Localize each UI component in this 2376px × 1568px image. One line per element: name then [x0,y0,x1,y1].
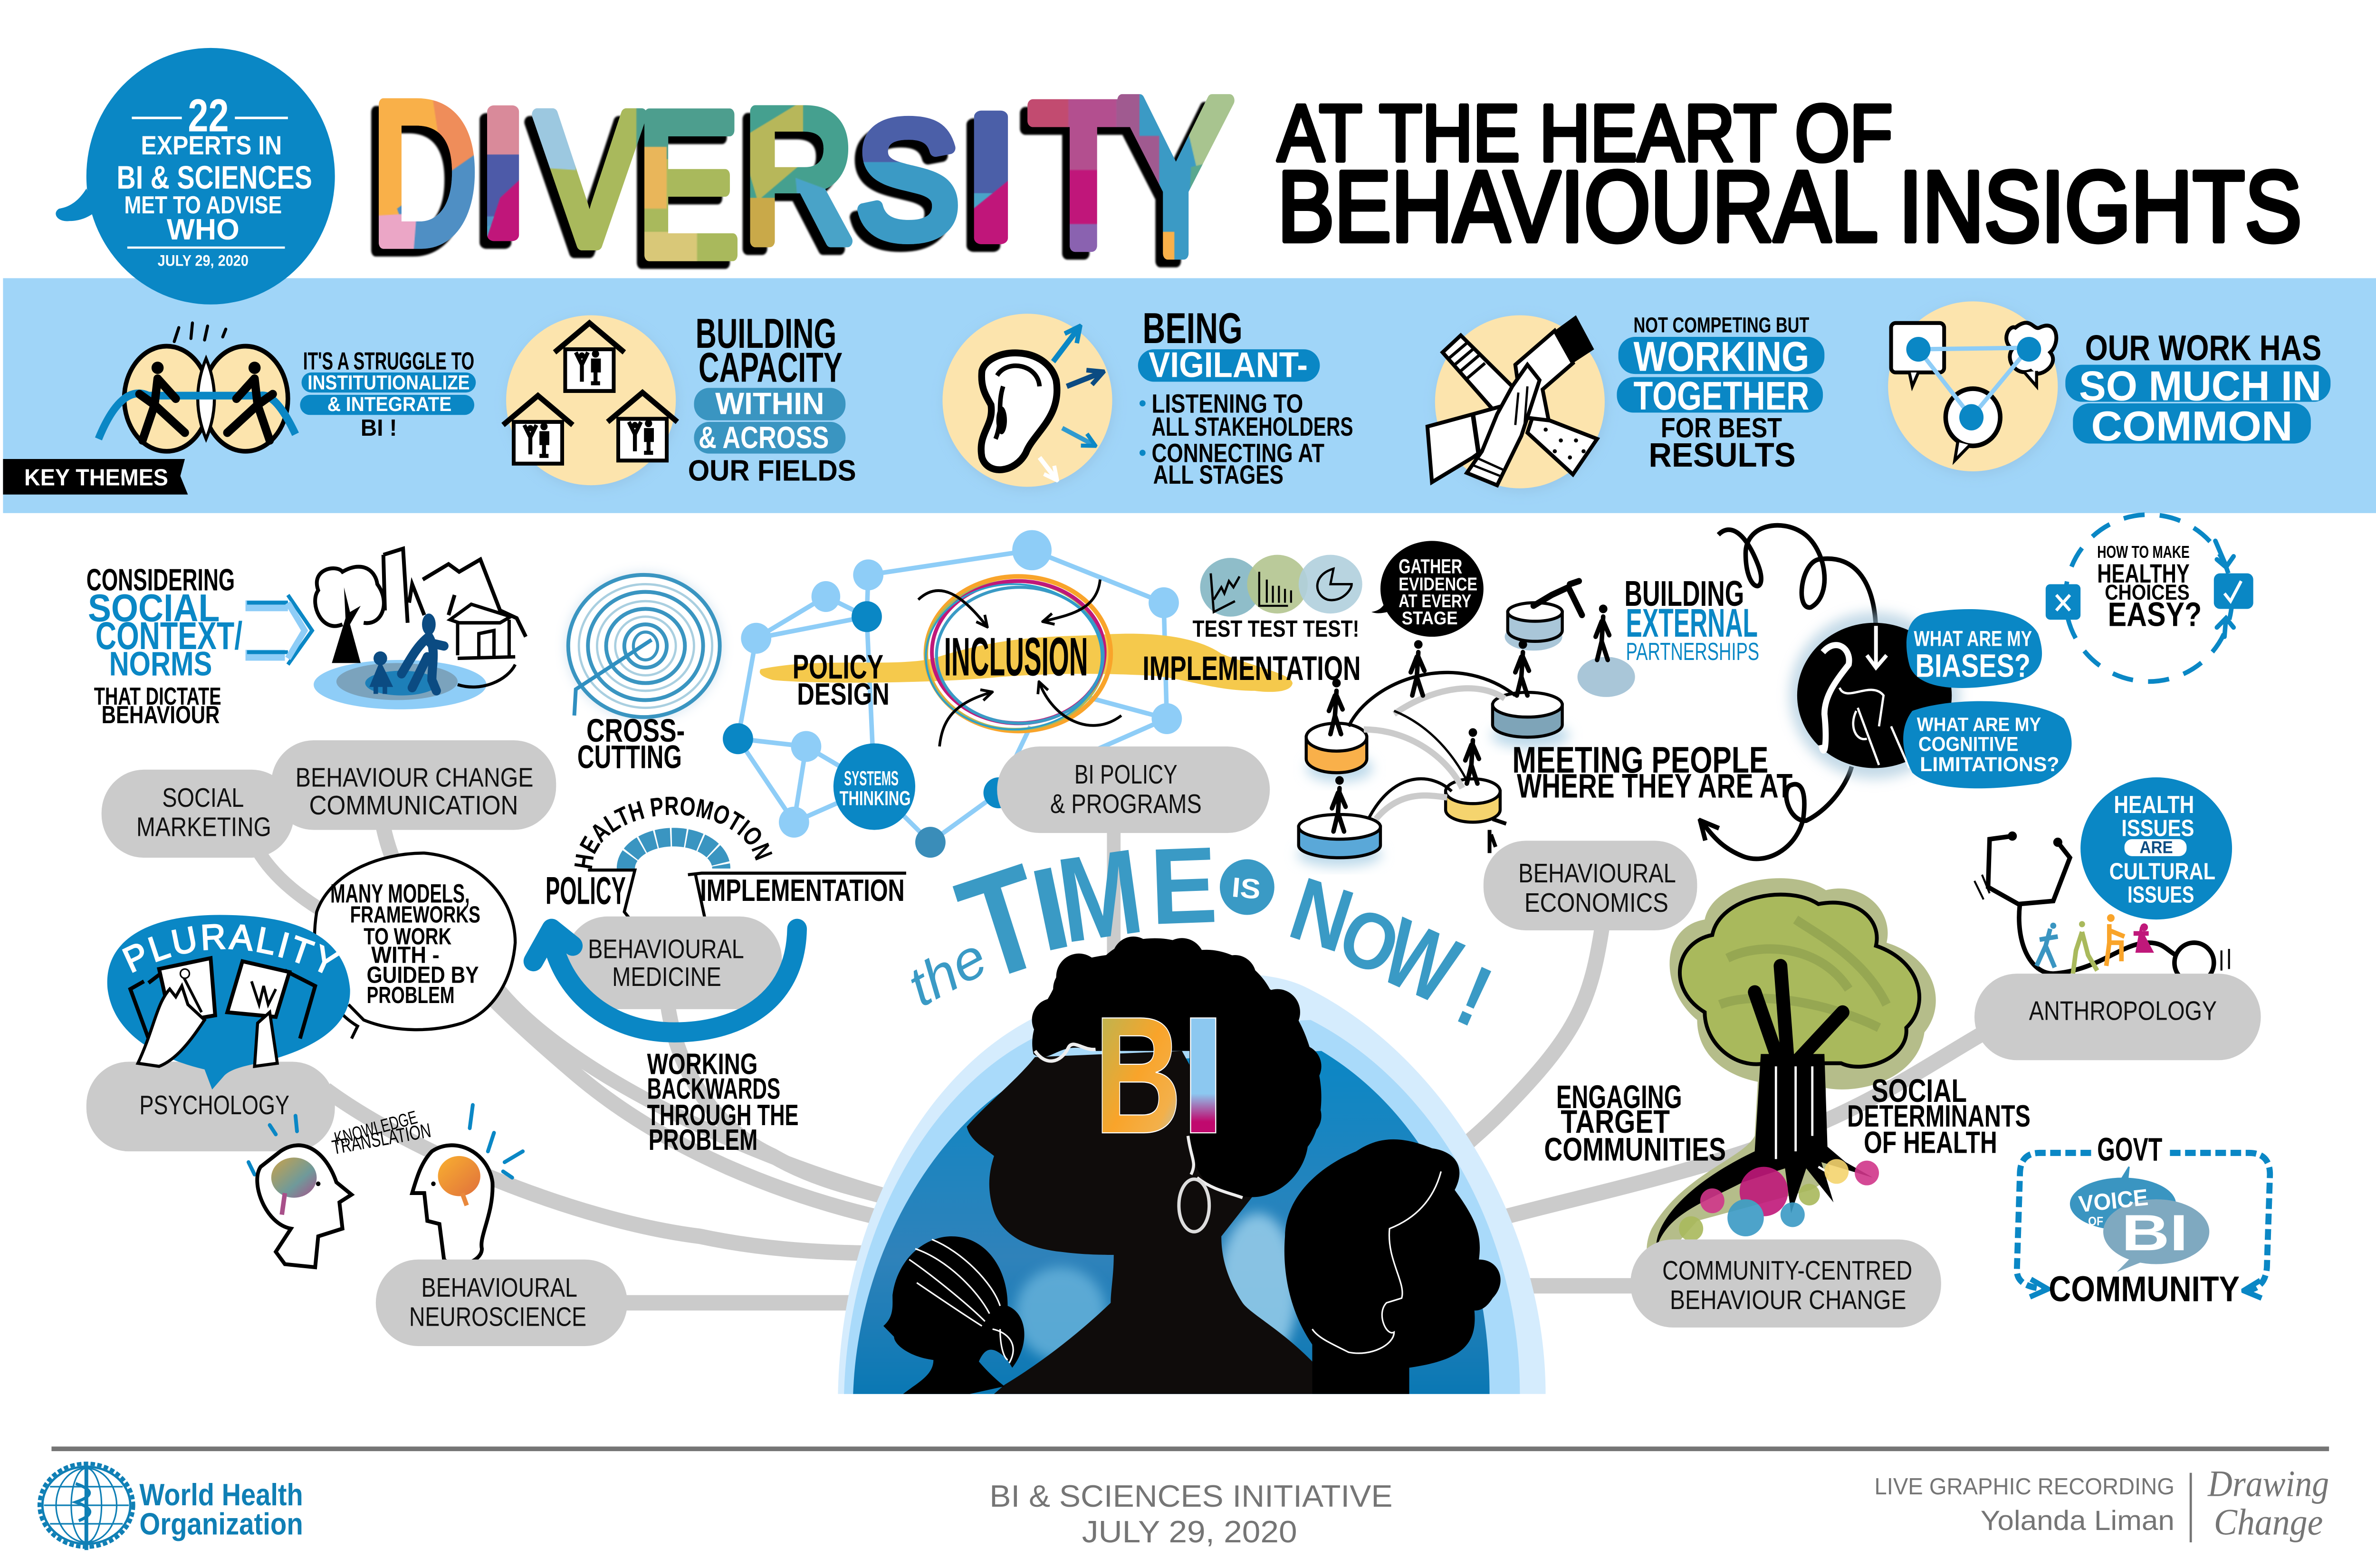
speech bubble: many models [315,853,515,1039]
footer: credit: LIVE GRAPHIC RECORDING [1875,1474,2175,1500]
theme 3: being vigilant [942,304,1353,490]
title: at the heart of behavioural insights [1277,88,2302,263]
network: policy to implementation [723,530,1361,858]
grey pill: behaviour change communication: BEHAVIOUR CHANGE [296,762,533,793]
test test test charts: TEST TEST TEST! [1193,616,1359,642]
grey pill: community-centred behaviour change: COMMUNITY-CENTRED [1662,1255,1912,1285]
grey pill: psychology: PSYCHOLOGY [139,1090,289,1120]
headline: the time is now: W [1368,898,1474,1024]
heads: knowledge translation: KNOWLEDGE [332,1107,420,1149]
speech bubble: cognitive limitations [1903,701,2072,788]
root dots [1679,1159,1879,1241]
central dome [838,974,1546,1394]
icon: three houses [503,316,677,488]
bullets: CONNECTING AT [1151,438,1324,468]
headline: the time is now: the [898,926,996,1018]
text: working backwards: BACKWARDS [647,1072,780,1105]
logo: World Health Organization: World Health [139,1477,303,1512]
speech bubble: many models: MANY MODELS, [330,879,470,908]
speech bubble: gather evidence: AT EVERY [1399,591,1471,612]
health promotion arch: HEALTH PROMOTION [568,791,778,871]
footer: initiative and date: BI & SCIENCES INITIATIVE [989,1479,1392,1513]
node: systems thinking: THINKING [840,787,910,810]
bubble: health issues are cultural issues: ARE [2140,838,2173,857]
social context block: NORMS [109,645,212,683]
icon: two people pulling apart [98,323,296,451]
bubble: voice of BI [2070,1167,2209,1272]
theme 2: building capacity: OUR FIELDS [688,454,856,487]
network: policy to implementation: DESIGN [797,677,890,711]
bubble: health issues are cultural issues: ISSUES [2121,815,2194,841]
speech bubble: many models: GUIDED BY [367,962,479,988]
network links [738,550,1167,842]
theme 5: so much in common: OUR WORK HAS [2085,328,2321,368]
speech bubble: biases: WHAT ARE MY [1914,626,2032,651]
dashed cycle: healthy choices easy [2046,515,2253,681]
bubble: health issues are cultural issues: ISSUES [2127,882,2194,908]
title: DIVERSITY: I [476,73,530,273]
building external partnerships [1624,574,1759,665]
silhouette: man with hand [1284,1139,1501,1394]
bullets [1140,389,1353,489]
ring: inclusion [918,576,1121,746]
grey pill: behavioural medicine with arrow [533,917,797,1033]
building external partnerships: BUILDING [1624,574,1744,613]
speech bubble: 22 experts: JULY 29, 2020 [158,252,249,269]
theme 1: struggle to institutionalize [98,323,476,451]
pill: institutionalize: INSTITUTIONALIZE [307,371,470,394]
theme 4: working together [1428,313,1824,491]
bubble: voice of BI: BI [2121,1204,2188,1262]
text: social determinants of health: DETERMINANTS [1847,1099,2031,1133]
speech bubble: gather evidence: EVIDENCE [1399,574,1477,595]
label: key themes [3,459,188,495]
grey pill: behavioural neuroscience: NEUROSCIENCE [409,1301,586,1332]
text: working backwards: WORKING [647,1048,757,1080]
grey pill: psychology [86,1061,335,1151]
speech bubble: 22 experts: BI & SCIENCES [117,160,312,196]
text: engaging target communities [1544,1079,1726,1168]
building external partnerships: EXTERNAL [1626,600,1758,645]
footer rule [51,1446,2329,1451]
title: DIVERSITY: E [636,71,739,299]
grey pill: BI policy and programs [997,746,1270,833]
pill: so much in: SO MUCH IN [2079,363,2321,410]
arrow: double into scene [246,595,312,665]
meeting people where they are at: WHERE THEY ARE AT [1517,767,1792,805]
speech bubble: many models: WITH - [371,942,440,968]
footer: initiative and date [989,1479,1392,1549]
speech bubble: gather evidence [1371,541,1484,637]
yellow brush stroke [760,634,1293,692]
target: cross-cutting spiral: CUTTING [577,739,682,775]
dashed cycle: healthy choices easy: HEALTHY [2097,559,2190,588]
badge: is: IS [1231,872,1262,905]
govt and community loop: GOVT [2097,1132,2162,1168]
ring: inclusion: INCLUSION [944,626,1088,687]
social context block: SOCIAL [88,587,220,630]
grey pill: community-centred behaviour change: BEHAVIOUR CHANGE [1670,1284,1906,1315]
target: cross-cutting spiral [567,574,721,775]
grey pill: behavioural economics [1484,841,1697,930]
social context block: CONSIDERING [86,563,235,597]
grey pill: social marketing: MARKETING [136,812,271,842]
footer: credit: Change [2214,1501,2323,1543]
grey pill: behavioural economics: BEHAVIOURAL [1518,858,1676,888]
speech bubble: 22 experts [56,48,335,305]
title: DIVERSITY: I [962,79,1020,276]
text: working backwards: THROUGH THE [647,1099,798,1131]
title: DIVERSITY: R [742,71,854,281]
theme 4: working together: RESULTS [1648,437,1796,474]
social context block [86,549,526,728]
emblem [39,1463,134,1550]
icon: tree with roots [1647,878,1936,1264]
headline: the time is now: I [1021,841,1080,976]
node: systems thinking: SYSTEMS [844,767,899,789]
text: social determinants of health [1847,1073,2031,1160]
letters: BI: B [1094,982,1182,1168]
grey pill: social marketing [102,770,294,858]
speech bubble: 22 experts: EXPERTS IN [141,131,282,160]
headline: the time is now: ! [1444,947,1505,1046]
silhouette: girl with ponytail [883,1236,1025,1394]
pill: and across: & ACROSS [699,421,829,455]
grey pill: behavioural medicine with arrow: BEHAVIOURAL [588,934,744,964]
silhouette: woman [967,937,1322,1394]
bubble: plurality [107,915,350,1090]
pill: together: TOGETHER [1634,373,1809,418]
badge: is [1220,859,1274,915]
bubble: health issues are cultural issues: CULTURAL [2109,859,2215,885]
speech bubble: 22 experts: WHO [167,213,240,246]
icon: ear with arrows [942,314,1114,490]
bubble: plurality: PLURALITY [117,916,344,984]
speech bubble: many models: FRAMEWORKS [350,902,480,928]
network: policy to implementation: POLICY [793,648,883,686]
footer: credit [1875,1463,2329,1543]
pill: vigilant: VIGILANT- [1149,345,1308,385]
pill: within: WITHIN [715,386,824,421]
grey pill: anthropology: ANTHROPOLOGY [2029,995,2217,1026]
icon: left head [257,1145,352,1267]
headline: the time is now: T [942,832,1063,1013]
social context block: THAT DICTATE [94,682,221,710]
grey pill: social marketing: SOCIAL [162,782,244,813]
key themes band [3,278,2376,513]
icon: stethoscope with community [1974,832,2229,983]
speech bubble: 22 experts: MET TO ADVISE [124,191,282,219]
speech bubble: cognitive limitations: WHAT ARE MY [1917,714,2041,736]
health promotion arch: POLICY [546,870,626,913]
bullets: ALL STAKEHOLDERS [1151,412,1353,441]
grey pill: behavioural economics: ECONOMICS [1524,887,1668,918]
target: cross-cutting spiral: CROSS- [586,713,685,749]
title: DIVERSITY: S [856,89,959,271]
bubble: voice of BI: OF [2088,1215,2103,1228]
headline: the time is now: M [1051,824,1150,968]
icon: cross box [2046,584,2080,620]
meeting people where they are at [1490,740,1792,853]
theme 1: struggle to institutionalize: BI ! [361,415,397,441]
speech bubble: biases: BIASES? [1916,648,2031,684]
speech bubble: cognitive limitations: LIMITATIONS? [1920,753,2060,775]
speech bubble: many models: TO WORK [364,924,451,949]
text: working backwards: PROBLEM [649,1123,757,1156]
headline: the time is now: E [1148,824,1219,947]
grey pill: behavioural neuroscience: BEHAVIOURAL [421,1272,577,1302]
text: working backwards [647,1048,798,1156]
theme 3: being vigilant: BEING [1142,304,1243,353]
icon: connected speech bubbles [1888,301,2060,475]
govt and community loop: COMMUNITY [2049,1269,2240,1309]
text: social determinants of health: OF HEALTH [1864,1125,1997,1160]
health promotion arch [546,791,906,927]
grey pill: behaviour change communication [271,740,556,830]
govt and community loop [2017,1132,2270,1309]
grey pill: BI policy and programs: BI POLICY [1074,759,1178,789]
icon: stacked hands [1428,316,1606,491]
theme 2: building capacity: BUILDING [696,310,836,357]
bullets: LISTENING TO [1151,389,1303,419]
logo: World Health Organization: Organization [139,1507,303,1541]
test test test charts [1193,555,1362,642]
title: DIVERSITY [371,52,1234,301]
headline: the time is now: N [1279,858,1364,971]
dashed cycle: healthy choices easy: CHOICES [2105,580,2190,604]
swoops between stones [1349,672,1515,819]
grey pill: behavioural medicine with arrow: MEDICINE [612,962,721,992]
dashed cycle: healthy choices easy: HOW TO MAKE [2097,543,2190,562]
network nodes [723,530,1182,858]
title: at the heart of behavioural insights: AT THE HEART OF [1277,88,1893,178]
building external partnerships: PARTNERSHIPS [1626,637,1759,665]
scene: neighbourhood with adult and child [314,549,526,709]
grey pill: BI policy and programs: & PROGRAMS [1050,788,1202,819]
text: engaging target communities: TARGET [1561,1104,1670,1140]
theme 2: building capacity [503,310,856,488]
label: key themes: KEY THEMES [24,465,168,490]
grey pill: community-centred behaviour change [1630,1240,1941,1328]
title: DIVERSITY: V [537,74,643,285]
theme 2: building capacity: CAPACITY [699,344,843,391]
speech bubble: gather evidence: GATHER [1399,555,1462,578]
black curl arrow [1702,526,1876,859]
icon: right head [412,1145,493,1265]
text: engaging target communities: ENGAGING [1556,1079,1682,1115]
meeting people where they are at: MEETING PEOPLE [1512,740,1768,781]
footer: credit: Drawing [2207,1463,2329,1504]
arrow: circular blue [533,929,797,1033]
health promotion arch: IMPLEMENTATION [700,873,905,908]
pill: working: WORKING [1634,334,1809,380]
title: DIVERSITY: D [371,61,477,286]
social context block: CONTEXT/ [96,614,242,658]
title: DIVERSITY: Y [1118,52,1234,301]
logo: World Health Organization [39,1463,303,1550]
grey pill: behaviour change communication: COMMUNICATION [309,790,518,820]
grey pill: anthropology [1974,974,2261,1060]
speech bubble: biases [1907,609,2042,688]
dashed cycle: healthy choices easy: EASY? [2108,596,2202,633]
title: DIVERSITY: T [1029,61,1138,289]
speech bubble: cognitive limitations: COGNITIVE [1918,733,2018,755]
grey pill: behavioural neuroscience [376,1260,627,1346]
bubble: health issues are cultural issues [2080,777,2232,919]
speech bubble: 22 experts: 22 [188,90,229,142]
arrows into ring [918,580,1121,746]
headline: the time is now: O [1327,889,1412,994]
theme 1: struggle to institutionalize: IT'S A STRUGGLE TO [303,347,474,374]
pill: and integrate: & INTEGRATE [327,393,451,415]
icon: tick box [2214,574,2253,609]
pill: common: COMMON [2091,403,2293,449]
letters: BI: I [1179,982,1227,1168]
theme 4: working together: NOT COMPETING BUT [1634,313,1810,337]
network: policy to implementation: IMPLEMENTATION [1142,650,1361,688]
speech bubble: gather evidence: STAGE [1402,608,1458,629]
head: thinking person [1790,612,1959,779]
text: social determinants of health: SOCIAL [1871,1073,1967,1109]
heads: knowledge translation: TRANSLATION [330,1119,432,1159]
text: engaging target communities: COMMUNITIES [1544,1132,1726,1168]
social context block: BEHAVIOUR [102,701,220,728]
footer: initiative and date: JULY 29, 2020 [1082,1514,1297,1549]
speech bubble: many models: PROBLEM [367,982,455,1008]
bubble: health issues are cultural issues: HEALTH [2114,790,2194,818]
heads: knowledge translation [249,1105,523,1267]
theme 4: working together: FOR BEST [1661,413,1782,444]
footer: credit: Yolanda Liman [1981,1505,2175,1536]
node: systems thinking [834,743,915,830]
connector lines to central figures [258,819,1993,1303]
headline: the time is now [898,824,1505,1046]
earring [1179,1179,1209,1232]
bubble: voice of BI: VOICE [2078,1184,2149,1217]
theme 5: so much in common [1888,301,2330,475]
stepping stones with people [1297,581,1635,867]
bullets: ALL STAGES [1153,460,1284,489]
